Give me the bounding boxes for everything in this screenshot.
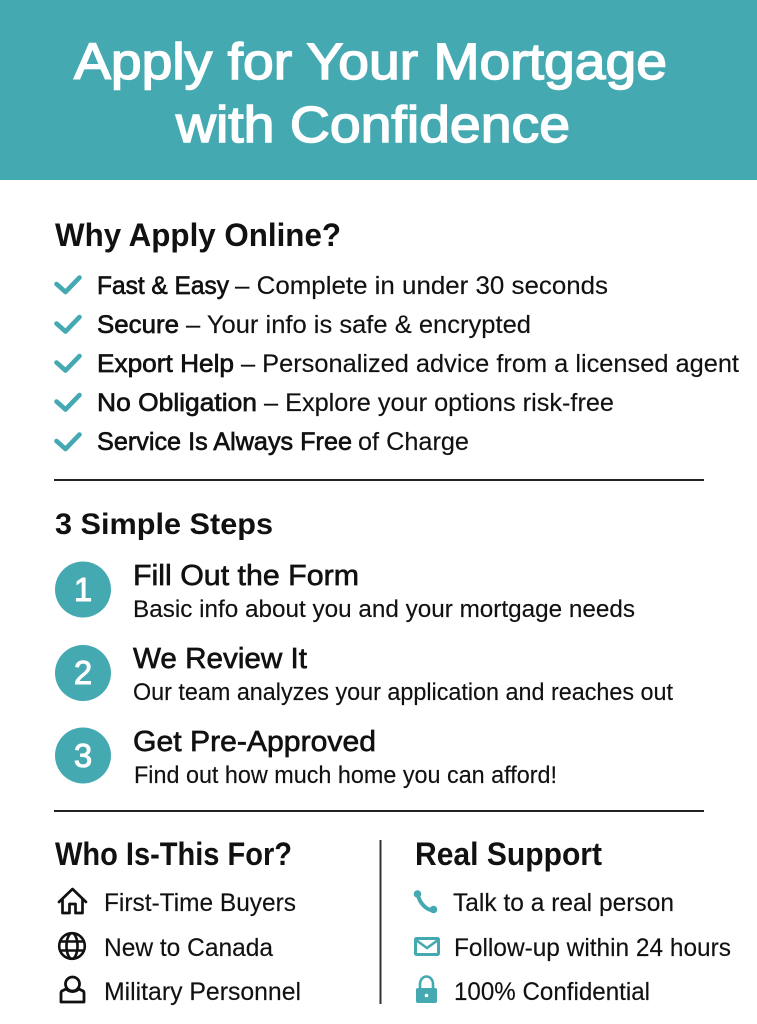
step 1: Basic info about you and your mortgage needs <box>133 596 635 623</box>
panel: who is this for <box>55 836 301 1006</box>
audience item: new to canada: New to Canada <box>104 934 273 962</box>
panel: why apply online <box>55 217 739 456</box>
checklist item: secure: Secure <box>97 311 179 339</box>
step 1 <box>55 560 635 623</box>
step 2: 2 <box>74 654 92 691</box>
panel: real support <box>414 836 731 1006</box>
audience item: first-time buyers: First-Time Buyers <box>104 889 296 917</box>
step 2: Our team analyzes your application and reaches out <box>133 679 673 706</box>
heading: 3 simple steps: 3 Simple Steps <box>55 508 273 541</box>
step 3 <box>55 726 557 789</box>
checklist item: no obligation <box>56 389 614 417</box>
heading: why apply online: Why Apply Online? <box>55 217 341 253</box>
checklist item: export help: Export Help <box>97 350 234 378</box>
title: Apply for Your Mortgage <box>74 33 667 90</box>
checklist item: service free <box>56 428 469 456</box>
step 2: We Review It <box>133 643 307 675</box>
checklist item: service free: of Charge <box>358 428 469 456</box>
checklist item: secure: – Your info is safe & encrypted <box>186 311 531 339</box>
step 3: 3 <box>74 737 92 774</box>
heading: real support: Real Support <box>415 836 602 872</box>
support item: 100% confidential: 100% Confidential <box>454 978 650 1006</box>
checklist item: service free: Service Is Always Free <box>97 428 352 456</box>
panel: 3 simple steps <box>55 508 673 789</box>
heading: who is this for: Who Is-This For? <box>55 836 292 872</box>
step 1: Fill Out the Form <box>133 560 359 592</box>
checklist item: export help: – Personalized advice from a licensed agent <box>241 350 739 378</box>
title <box>74 33 667 153</box>
checklist item: fast and easy <box>56 272 608 300</box>
step 3: Find out how much home you can afford! <box>134 762 557 789</box>
support item: follow-up within 24 hours: Follow-up within 24 hours <box>454 934 731 962</box>
support item: talk to a real person: Talk to a real person <box>453 889 674 917</box>
step 1: 1 <box>74 571 92 608</box>
step 2 <box>55 643 673 706</box>
checklist item: no obligation: – Explore your options risk-free <box>264 389 614 417</box>
checklist item: fast and easy: Fast & Easy <box>97 272 229 300</box>
step 3: Get Pre-Approved <box>133 726 376 758</box>
audience item: military personnel: Military Personnel <box>104 978 301 1006</box>
header banner <box>0 0 757 180</box>
checklist item: no obligation: No Obligation <box>97 389 257 417</box>
title: with Confidence <box>175 96 570 153</box>
checklist item: fast and easy: – Complete in under 30 seconds <box>235 272 608 300</box>
